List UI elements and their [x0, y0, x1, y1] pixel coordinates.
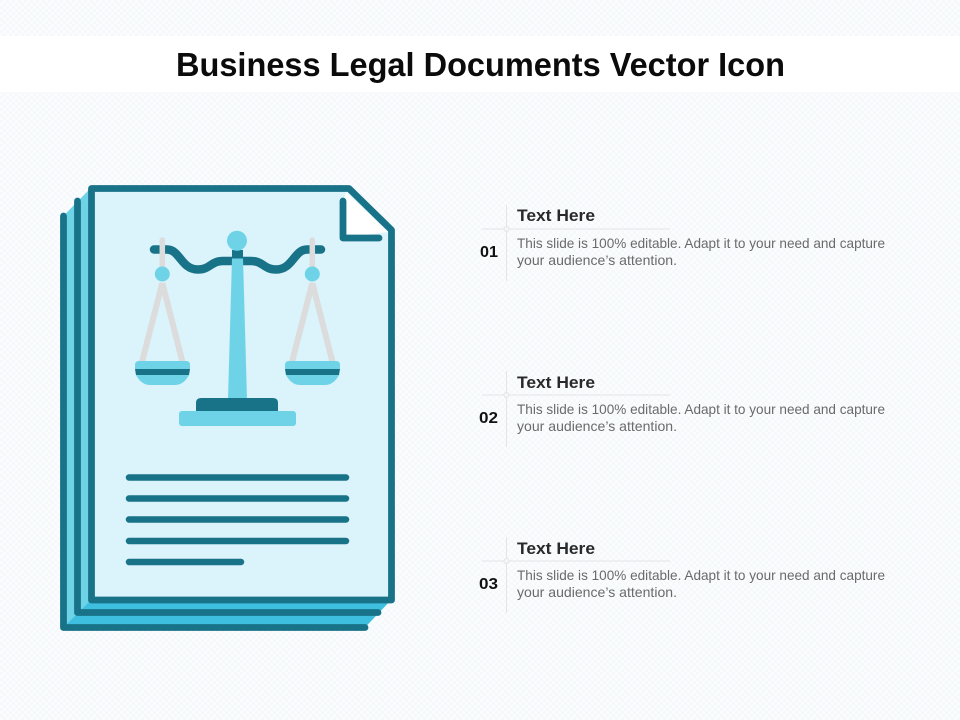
hanger strings: [142, 240, 332, 362]
left joint: [155, 266, 170, 282]
icon: legal document stack: [64, 188, 392, 628]
beam: [154, 250, 321, 270]
title band: [0, 36, 960, 92]
icon: scales of justice: [135, 231, 340, 426]
left pan: [135, 361, 190, 385]
heading 02: Text Here: [517, 373, 595, 392]
front page: [92, 188, 392, 600]
body 02: your audience’s attention.: [517, 418, 677, 434]
heading 03: Text Here: [517, 539, 595, 558]
column collar: [232, 250, 243, 258]
heading 01: Text Here: [517, 206, 595, 225]
base: [179, 398, 296, 426]
body 01: This slide is 100% editable. Adapt it to your need and capture: [517, 235, 885, 251]
right joint: [305, 266, 320, 282]
page fold: [343, 192, 388, 238]
back page sheets: [64, 188, 391, 628]
document text lines: [129, 478, 346, 562]
number 02: 02: [479, 410, 498, 427]
column: [228, 258, 247, 399]
top knob: [227, 231, 247, 251]
item 02: [479, 371, 885, 447]
item 03: [479, 537, 885, 613]
body 03: your audience’s attention.: [517, 584, 677, 600]
number 01: 01: [480, 244, 498, 261]
title: Business Legal Documents Vector Icon: [176, 46, 785, 83]
right pan: [285, 361, 340, 385]
body 01: your audience’s attention.: [517, 252, 677, 268]
body 02: This slide is 100% editable. Adapt it to your need and capture: [517, 401, 885, 417]
number 03: 03: [479, 576, 498, 593]
body 03: This slide is 100% editable. Adapt it to your need and capture: [517, 567, 885, 583]
item 01: [480, 205, 885, 281]
